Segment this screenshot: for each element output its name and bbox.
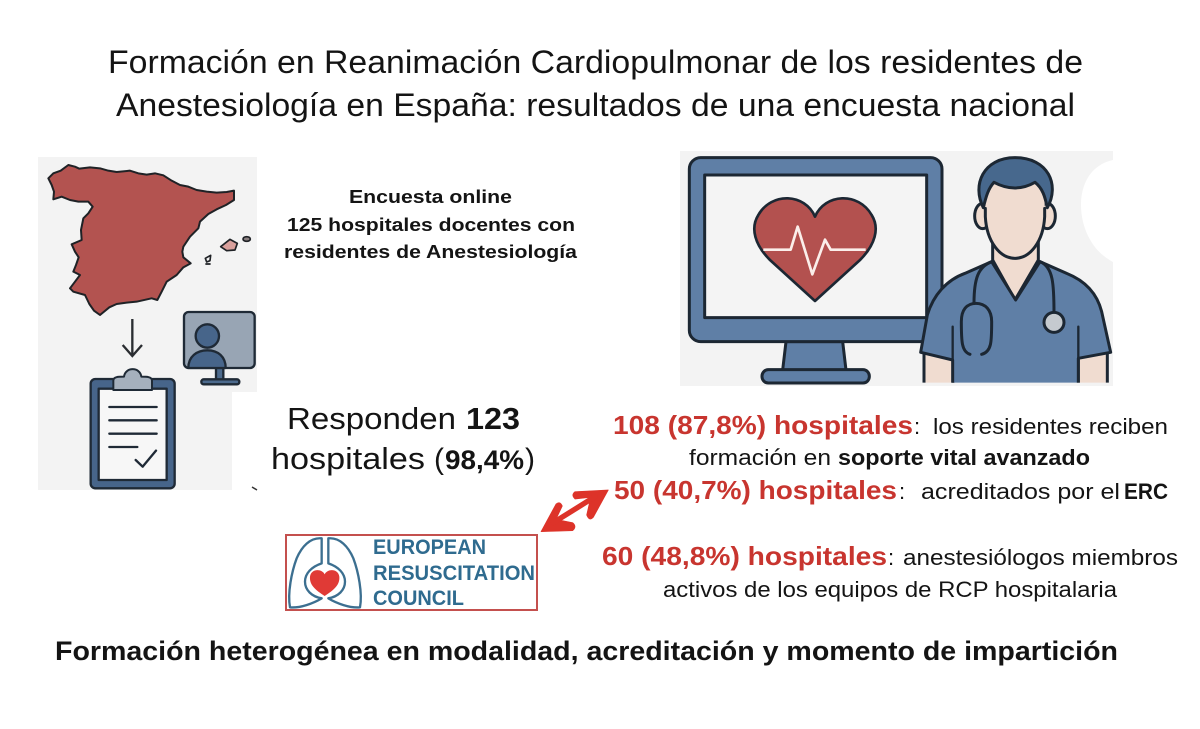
result: 60 hospitals: : [888, 545, 894, 570]
mark: small stray tick [252, 487, 257, 490]
text block: results [602, 410, 1178, 602]
panel: survey illustration [38, 157, 257, 490]
result: 50 hospitals: 50 (40,7%) hospitales [614, 475, 897, 505]
icon: map of Spain [48, 165, 250, 315]
text block: response rate [271, 401, 535, 476]
arrow: double-headed red arrow [541, 490, 608, 532]
title: Anestesiología en España: resultados de una encuesta nacional [116, 87, 1075, 123]
conclusion: Formación heterogénea en modalidad, acreditación y momento de impartición [55, 636, 1118, 666]
icon: lungs with heart [289, 538, 361, 607]
icon: down arrow [123, 319, 142, 356]
text block: response rate: Responden [287, 401, 456, 436]
text: logo wordmark: EUROPEAN [373, 536, 486, 559]
text: logo wordmark: COUNCIL [373, 587, 464, 610]
icon: clipboard checklist [91, 369, 175, 488]
result: 108 hospitals: los residentes reciben [933, 414, 1168, 439]
result: 60 hospitals: activos de los equipos de RCP hospitalaria [663, 577, 1118, 602]
text block: response rate: 123 [466, 401, 520, 436]
result: 108 hospitals: soporte vital avanzado [838, 445, 1090, 470]
result: 60 hospitals [602, 541, 1178, 602]
panel: medical illustration [680, 151, 1113, 387]
icon: computer user [184, 312, 255, 384]
text block: survey description: 125 hospitales docentes con [287, 214, 575, 235]
result: 50 hospitals: acreditados por el [921, 479, 1120, 504]
result: 108 hospitals: formación en [689, 445, 831, 470]
result: 108 hospitals [613, 410, 1168, 470]
text: logo wordmark [373, 536, 535, 610]
result: 50 hospitals: ERC [1124, 479, 1168, 504]
result: 108 hospitals: : [914, 414, 920, 439]
result: 60 hospitals: 60 (48,8%) hospitales [602, 541, 887, 571]
text block: response rate: 98,4% [445, 445, 524, 475]
title: Formación en Reanimación Cardiopulmonar de los residentes de [108, 44, 1083, 80]
result: 50 hospitals [614, 475, 1168, 505]
icon: heart with ECG [754, 198, 876, 301]
text block: response rate: ) [525, 443, 535, 476]
icon: red heart [310, 570, 339, 596]
result: 108 hospitals: 108 (87,8%) hospitales [613, 410, 913, 440]
logo: European Resuscitation Council [286, 535, 537, 610]
title [108, 44, 1083, 123]
text block: response rate: ( [434, 443, 444, 476]
result: 50 hospitals: : [899, 479, 905, 504]
text block: survey description [284, 186, 578, 262]
text: logo wordmark: RESUSCITATION [373, 562, 535, 585]
text block: response rate: hospitales [271, 441, 425, 476]
icon: doctor with stethoscope [921, 158, 1111, 387]
text block: survey description: Encuesta online [349, 186, 512, 207]
text block: survey description: residentes de Anestesiología [284, 241, 578, 262]
result: 60 hospitals: anestesiólogos miembros [903, 545, 1178, 570]
icon: monitor with heart [689, 158, 942, 383]
